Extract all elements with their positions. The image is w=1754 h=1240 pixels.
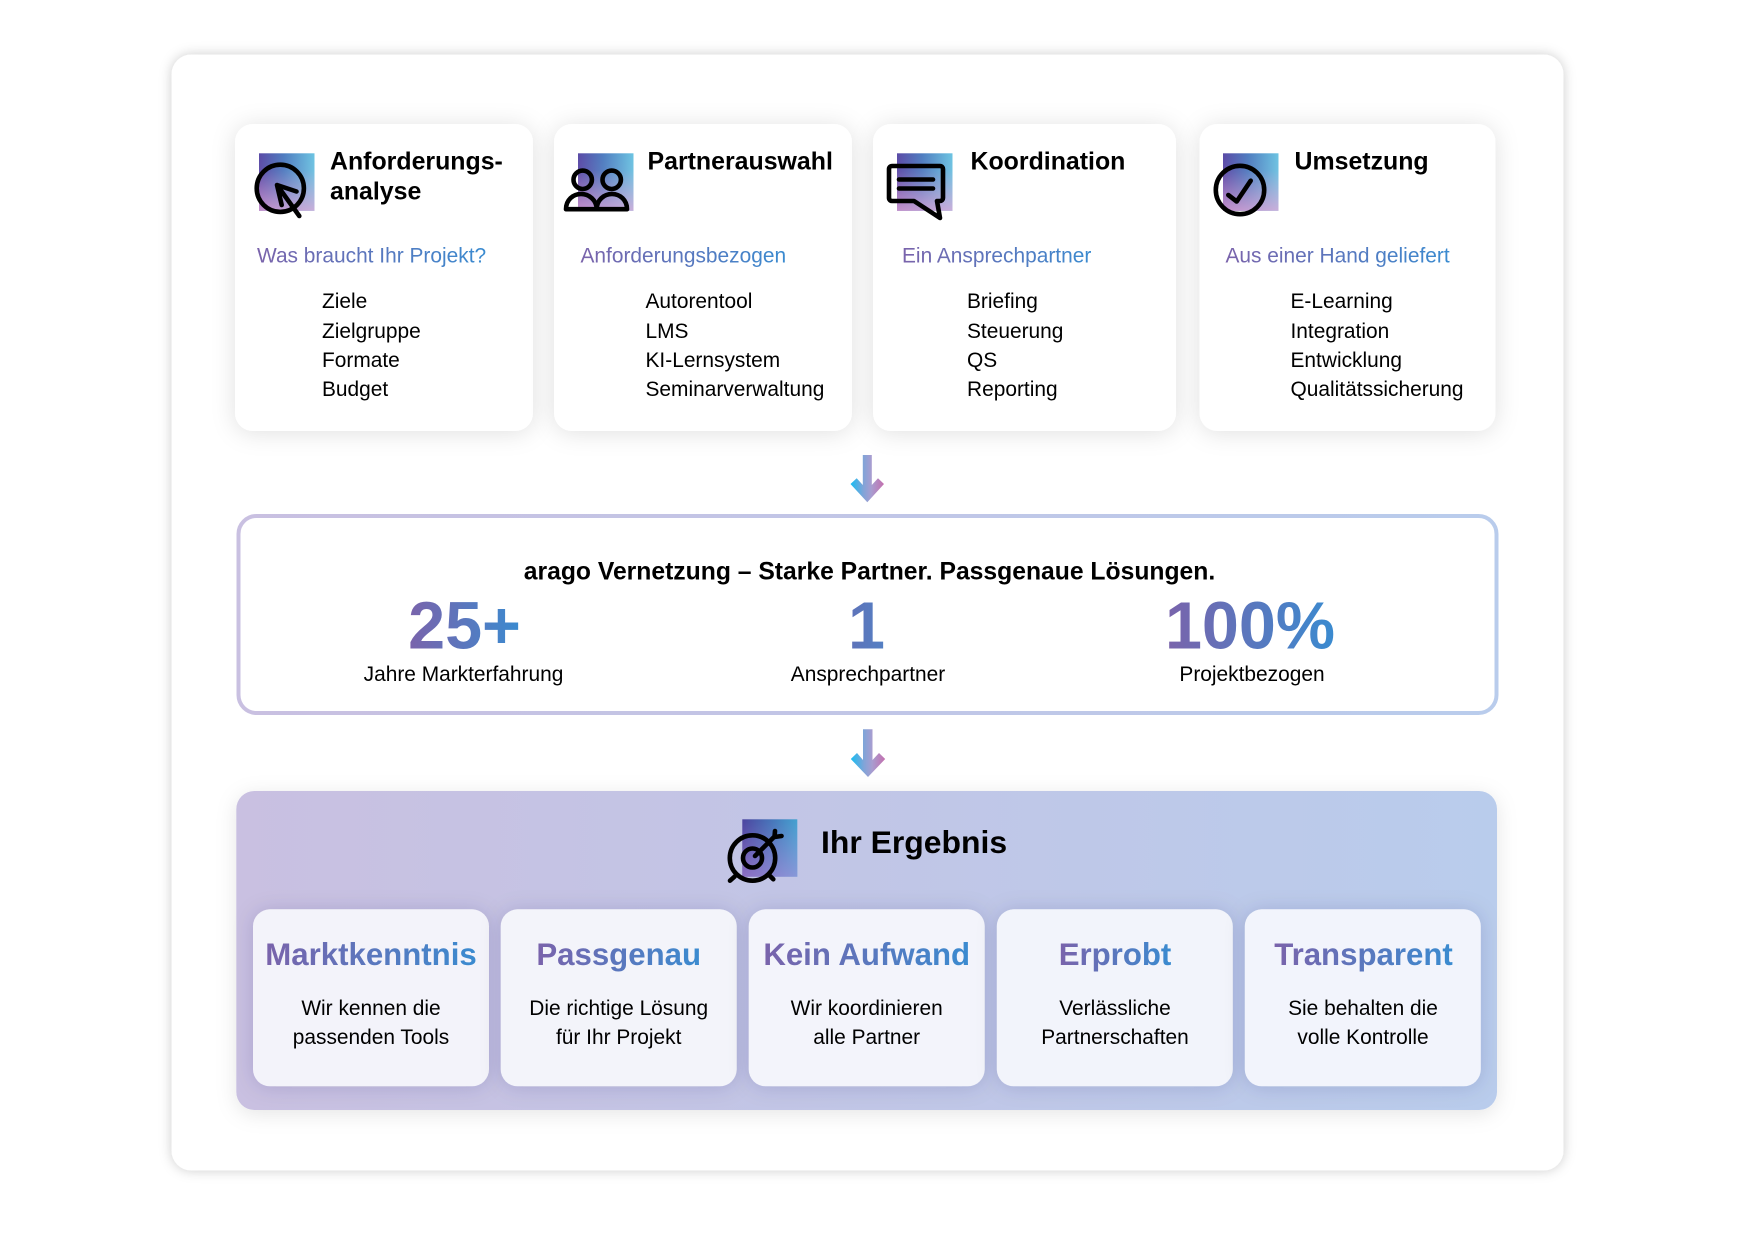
stat: 1 <box>791 590 945 686</box>
card: Erprobt: Erprobt <box>1059 937 1171 972</box>
card: Passgenau: für Ihr Projekt <box>556 1026 682 1049</box>
list: Steuerung <box>967 320 1063 343</box>
heading: Koordination <box>970 147 1125 175</box>
heading <box>330 147 503 205</box>
icon: check circle <box>1216 153 1278 214</box>
icon: target <box>730 819 797 881</box>
panel: Partnerauswahl <box>554 124 852 431</box>
arrow: down to network <box>850 455 884 502</box>
card: Marktkenntnis: Wir kennen die <box>301 997 441 1020</box>
list: LMS <box>646 320 688 343</box>
stat: 1: 1 <box>848 590 885 664</box>
panel: Umsetzung <box>1200 124 1496 431</box>
card: Erprobt <box>997 909 1233 1086</box>
card: Transparent: Sie behalten die <box>1288 997 1438 1020</box>
card: Transparent: volle Kontrolle <box>1297 1026 1429 1049</box>
icon: cursor in circle <box>257 153 314 216</box>
panel: arago Vernetzung <box>238 516 1496 713</box>
stat: 25+ <box>364 590 563 686</box>
stat: 100%: 100% <box>1165 590 1335 664</box>
card: Passgenau: Passgenau <box>536 937 701 972</box>
heading: Ihr Ergebnis <box>821 824 1007 860</box>
list <box>1290 290 1464 401</box>
heading: Partnerauswahl <box>648 147 833 175</box>
panel: Anforderungsanalyse <box>235 124 533 431</box>
card: Kein Aufwand <box>749 909 985 1086</box>
subtitle: Aus einer Hand geliefert <box>1226 245 1450 268</box>
card: Kein Aufwand: alle Partner <box>813 1026 920 1049</box>
list: Qualitätssicherung <box>1290 378 1464 401</box>
list: Entwicklung <box>1290 349 1402 372</box>
list: E-Learning <box>1290 290 1393 313</box>
list: Zielgruppe <box>322 320 421 343</box>
list: Reporting <box>967 378 1058 401</box>
icon: speech bubble <box>889 153 952 218</box>
list <box>967 290 1063 401</box>
card: Passgenau <box>501 909 737 1086</box>
heading: arago Vernetzung – Starke Partner. Passgenaue Lösungen. <box>524 558 1215 585</box>
list <box>322 290 421 401</box>
list: Autorentool <box>646 290 752 313</box>
heading: analyse <box>330 177 421 205</box>
card: Marktkenntnis <box>253 909 489 1086</box>
list: Formate <box>322 349 400 372</box>
stat: 1: Ansprechpartner <box>791 663 945 686</box>
card: Erprobt: Verlässliche <box>1059 997 1171 1020</box>
card: Marktkenntnis: passenden Tools <box>293 1026 449 1049</box>
panel: Ihr Ergebnis <box>236 791 1497 1110</box>
list: Ziele <box>322 290 367 313</box>
subtitle: Ein Ansprechpartner <box>902 245 1091 268</box>
card: Passgenau: Die richtige Lösung <box>529 997 708 1020</box>
heading: Anforderungs- <box>330 147 503 175</box>
card: Transparent: Transparent <box>1274 937 1453 972</box>
arrow: down to result <box>851 729 885 777</box>
stat: 100%: Projektbezogen <box>1179 663 1325 686</box>
list: Budget <box>322 378 388 401</box>
card: Kein Aufwand: Kein Aufwand <box>763 937 970 972</box>
list: Integration <box>1290 320 1389 343</box>
heading: Umsetzung <box>1294 147 1429 175</box>
list: KI-Lernsystem <box>646 349 780 372</box>
stat: 25+: 25+ <box>408 590 521 664</box>
list: QS <box>967 349 997 372</box>
list: Seminarverwaltung <box>646 378 824 401</box>
stat: 25+: Jahre Markterfahrung <box>364 663 563 686</box>
panel: main container <box>172 54 1564 1170</box>
card: Erprobt: Partnerschaften <box>1041 1026 1189 1049</box>
panel: Koordination <box>873 124 1176 431</box>
card: Transparent <box>1245 909 1481 1086</box>
icon: two people <box>566 153 634 211</box>
subtitle: Anforderungsbezogen <box>580 245 786 268</box>
card: Marktkenntnis: Marktkenntnis <box>265 937 477 972</box>
card: Kein Aufwand: Wir koordinieren <box>791 997 943 1020</box>
list <box>646 290 824 401</box>
subtitle: Was braucht Ihr Projekt? <box>257 245 486 268</box>
list: Briefing <box>967 290 1038 313</box>
